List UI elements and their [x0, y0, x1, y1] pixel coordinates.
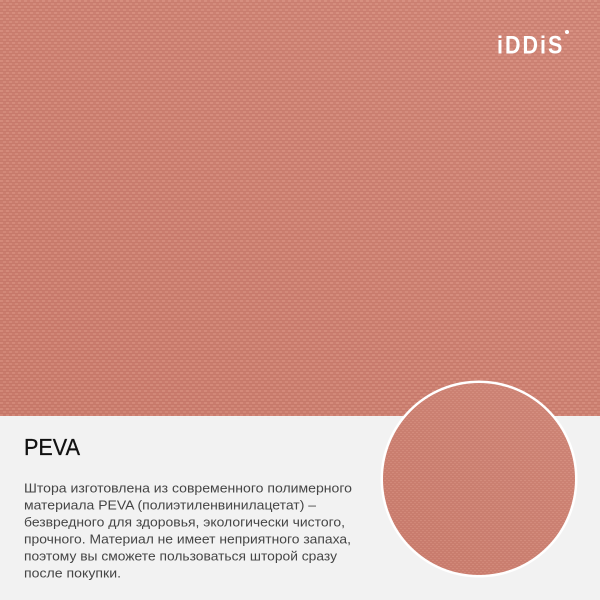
text block: description: после покупки.: [24, 566, 121, 580]
text block: description: поэтому вы сможете пользоваться шторой сразу: [24, 548, 338, 564]
text block: description: [24, 480, 352, 580]
text block: description: Штора изготовлена из современного полимерного: [24, 480, 352, 496]
heading: PEVA: PEVA: [24, 434, 81, 460]
panel: fabric photo background: [0, 0, 600, 416]
text block: description: безвредного для здоровья, экологически чистого,: [24, 514, 345, 530]
logo: iDDIS: iDDiS: [497, 31, 562, 59]
callout: magnified fabric circle: [380, 380, 578, 578]
text block: description: материала PEVA (полиэтиленвинилацетат) –: [24, 498, 317, 512]
text block: description: прочного. Материал не имеет неприятного запаха,: [24, 532, 351, 546]
panel: text background: [0, 416, 600, 600]
